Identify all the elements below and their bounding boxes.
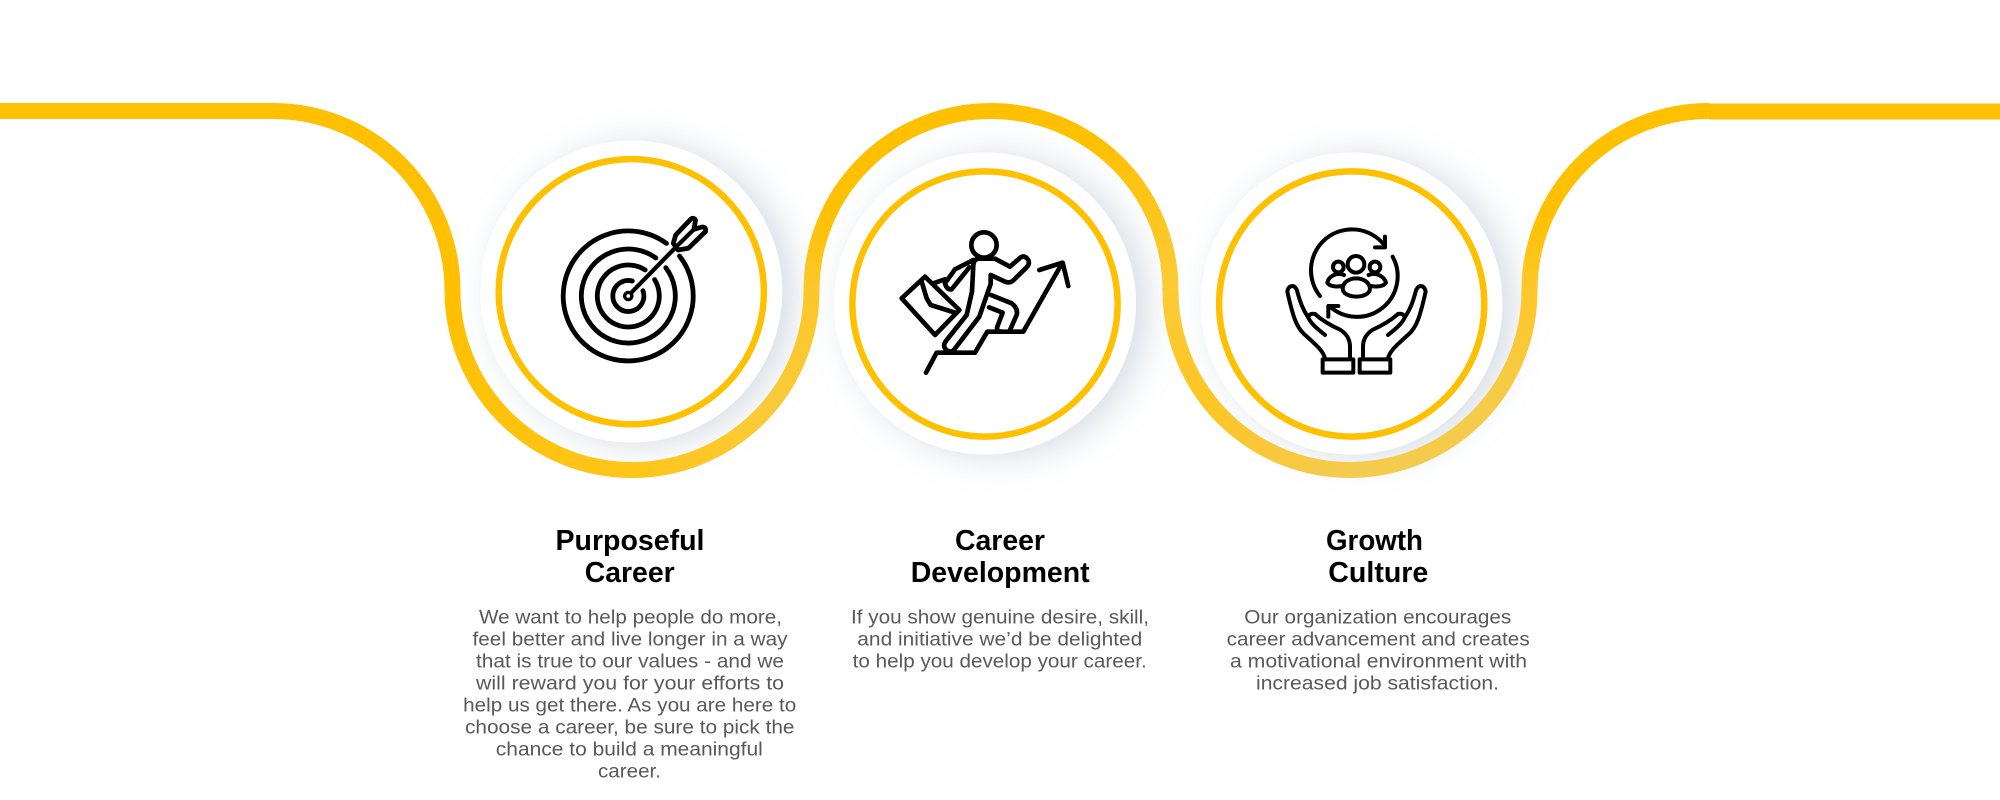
text block: Purposeful Career description: We want to help people do more, (479, 607, 782, 629)
text block: Growth Culture description: increased job satisfaction. (1256, 673, 1499, 695)
text block: Growth Culture description (1227, 607, 1530, 695)
winding yellow ribbon (0, 111, 2000, 470)
text block: Purposeful Career description: feel better and live longer in a way (472, 629, 788, 651)
text block: Career Development description: to help you develop your career. (853, 651, 1147, 673)
heading: Purposeful Career (556, 525, 704, 589)
yellow ring: step 1 (499, 159, 764, 424)
text block: Purposeful Career description: chance to build a meaningful (496, 739, 763, 761)
text block: Growth Culture description: a motivational environment with (1230, 651, 1527, 673)
white disc with soft shadow: step 1 (480, 140, 782, 442)
yellow ring: step 3 (1219, 171, 1484, 437)
text block: Growth Culture description: career advancement and creates (1227, 629, 1530, 651)
heading: Growth Culture: Growth (1326, 525, 1423, 557)
text block: Career Development description: and initiative we’d be delighted (857, 629, 1142, 651)
text block: Purposeful Career description: career. (598, 761, 661, 783)
heading: Purposeful Career: Career (585, 557, 675, 589)
heading: Career Development: Development (911, 557, 1090, 589)
yellow ring: step 2 (852, 171, 1118, 437)
text block: Career Development description: If you show genuine desire, skill, (851, 607, 1149, 629)
heading: Purposeful Career: Purposeful (556, 525, 704, 557)
icon: person climbing steps with briefcase (902, 232, 1068, 373)
heading: Growth Culture (1326, 525, 1428, 589)
icon: hands holding team in cycle (1287, 229, 1426, 373)
text block: Career Development description (851, 607, 1149, 673)
text block: Purposeful Career description: choose a career, be sure to pick the (465, 717, 794, 739)
heading: Growth Culture: Culture (1328, 557, 1428, 589)
text block: Purposeful Career description (463, 607, 796, 783)
text block: Purposeful Career description: help us get there. As you are here to (463, 695, 796, 717)
text block: Growth Culture description: Our organization encourages (1244, 607, 1512, 629)
heading: Career Development (911, 525, 1090, 589)
text block: Purposeful Career description: will reward you for your efforts to (475, 673, 784, 695)
white disc with soft shadow: step 2 (834, 152, 1136, 454)
white disc with soft shadow: step 3 (1200, 152, 1502, 454)
icon: target with arrow (563, 218, 706, 361)
heading: Career Development: Career (955, 525, 1045, 557)
text block: Purposeful Career description: that is true to our values - and we (476, 651, 784, 673)
